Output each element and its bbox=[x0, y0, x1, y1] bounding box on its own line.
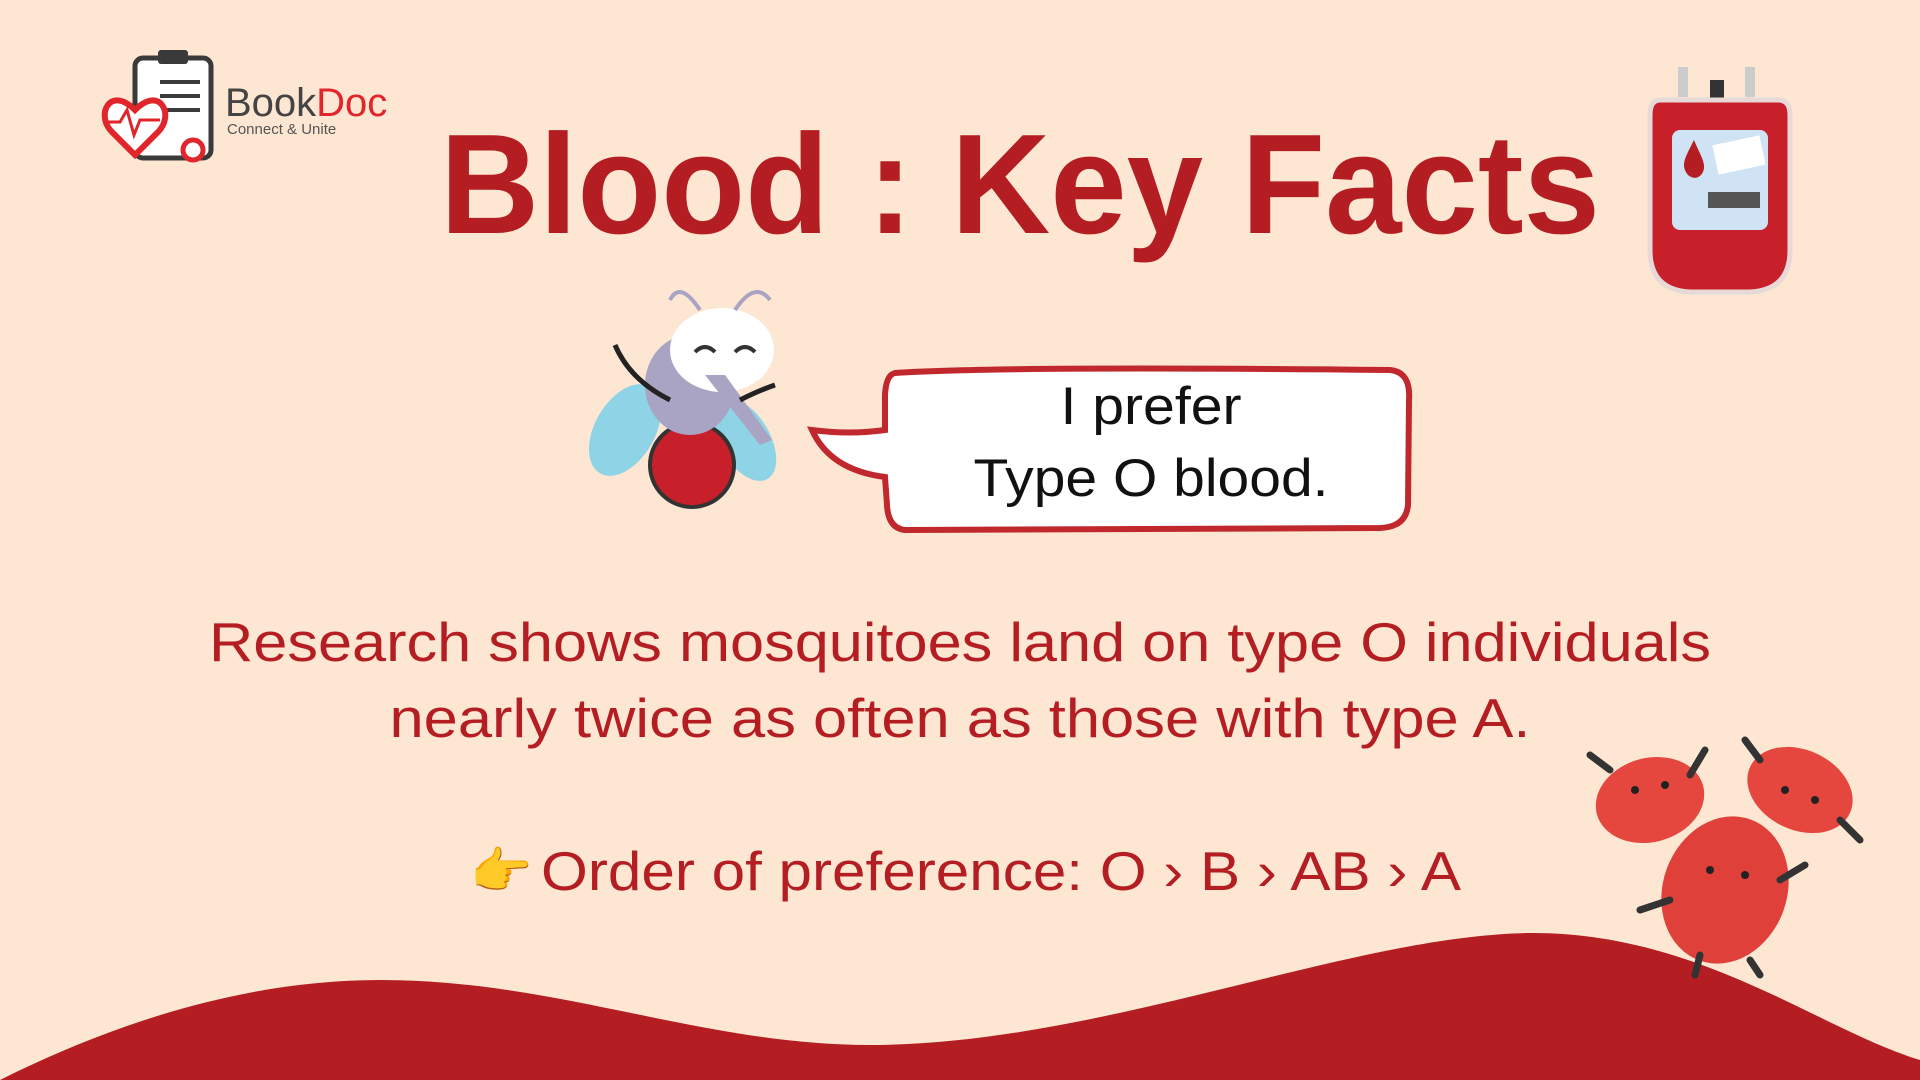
logo bbox=[105, 50, 387, 160]
icon: pointing hand: 👉 bbox=[470, 843, 532, 899]
logo: Connect & Unite bbox=[227, 121, 336, 138]
body text bbox=[209, 611, 1711, 749]
bottom wave bbox=[0, 933, 1920, 1080]
icon: blood cells bbox=[1586, 731, 1867, 982]
icon: mosquito bbox=[574, 292, 789, 507]
icon: clipboard heart bbox=[105, 50, 211, 160]
body text: nearly twice as often as those with type A. bbox=[390, 687, 1530, 749]
icon: blood bag bbox=[1650, 67, 1790, 292]
title: Blood : Key Facts bbox=[440, 105, 1600, 264]
bubble text: I prefer bbox=[1060, 377, 1242, 436]
speech bubble: Type O blood. bbox=[974, 449, 1328, 508]
speech bubble bbox=[812, 369, 1409, 530]
body text: Research shows mosquitoes land on type O individuals bbox=[209, 611, 1711, 673]
logo text: BookDoc bbox=[225, 81, 387, 125]
order of preference: Order of preference: O › B › AB › A bbox=[541, 840, 1461, 902]
